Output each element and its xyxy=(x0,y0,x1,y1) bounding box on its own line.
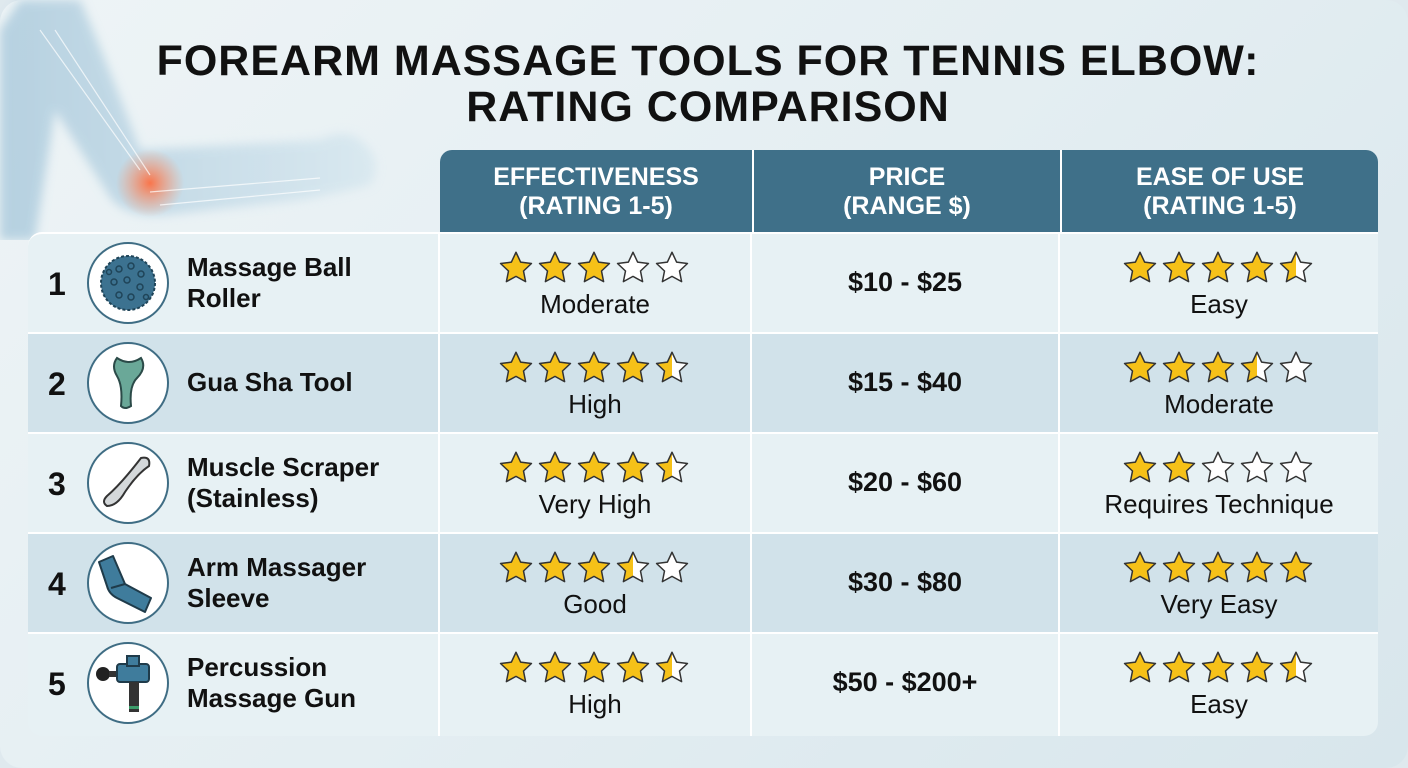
row 4: Very Easy xyxy=(1160,589,1278,619)
row 2: High xyxy=(568,389,622,419)
header: price: (RANGE $) xyxy=(843,192,971,220)
title: FOREARM MASSAGE TOOLS FOR TENNIS ELBOW: xyxy=(157,37,1259,85)
row 1: 1 xyxy=(48,266,66,302)
row 1: $10 - $25 xyxy=(848,267,962,297)
row 1: Easy xyxy=(1190,289,1248,319)
header: ease of use: (RATING 1-5) xyxy=(1143,192,1297,220)
row 1 xyxy=(28,232,1378,332)
row 5 xyxy=(28,632,1378,736)
icon: sleeve xyxy=(87,542,169,624)
row 5: Massage Gun xyxy=(187,683,356,713)
icon: massage gun xyxy=(87,642,169,724)
row 3 xyxy=(28,432,1378,532)
row 4: 4 xyxy=(48,566,66,602)
row 5: 5 xyxy=(48,666,66,702)
header: ease of use: EASE OF USE xyxy=(1136,163,1304,191)
row 5: Percussion xyxy=(187,652,327,682)
icon: scraper xyxy=(87,442,169,524)
row 2: $15 - $40 xyxy=(848,367,962,397)
header: effectiveness: EFFECTIVENESS xyxy=(493,163,699,191)
header: ease of use xyxy=(1060,150,1378,232)
row 1: Moderate xyxy=(540,289,650,319)
title: RATING COMPARISON xyxy=(466,83,950,131)
header: effectiveness: (RATING 1-5) xyxy=(519,192,673,220)
row 4: $30 - $80 xyxy=(848,567,962,597)
row 2 xyxy=(28,332,1378,432)
header: price xyxy=(752,150,1060,232)
header: effectiveness xyxy=(440,150,752,232)
icon: gua sha xyxy=(87,342,169,424)
row 3: Requires Technique xyxy=(1104,489,1334,519)
row 5: Easy xyxy=(1190,689,1248,719)
row 4 xyxy=(28,532,1378,632)
title xyxy=(157,37,1259,131)
header: price: PRICE xyxy=(869,163,945,191)
illustration: arm with elbow highlight xyxy=(0,0,375,240)
row 2: 2 xyxy=(48,366,66,402)
row 1: Massage Ball xyxy=(187,252,352,282)
row 4: Arm Massager xyxy=(187,552,366,582)
icon: massage ball xyxy=(87,242,169,324)
row 2: Moderate xyxy=(1164,389,1274,419)
row 2: Gua Sha Tool xyxy=(187,367,353,397)
row 3: Muscle Scraper xyxy=(187,452,379,482)
row 3: (Stainless) xyxy=(187,483,318,513)
row 5: High xyxy=(568,689,622,719)
row 5: $50 - $200+ xyxy=(833,667,977,697)
row 3: 3 xyxy=(48,466,66,502)
row 1: Roller xyxy=(187,283,261,313)
row 4: Good xyxy=(563,589,627,619)
row 4: Sleeve xyxy=(187,583,269,613)
row 3: $20 - $60 xyxy=(848,467,962,497)
row 3: Very High xyxy=(539,489,651,519)
